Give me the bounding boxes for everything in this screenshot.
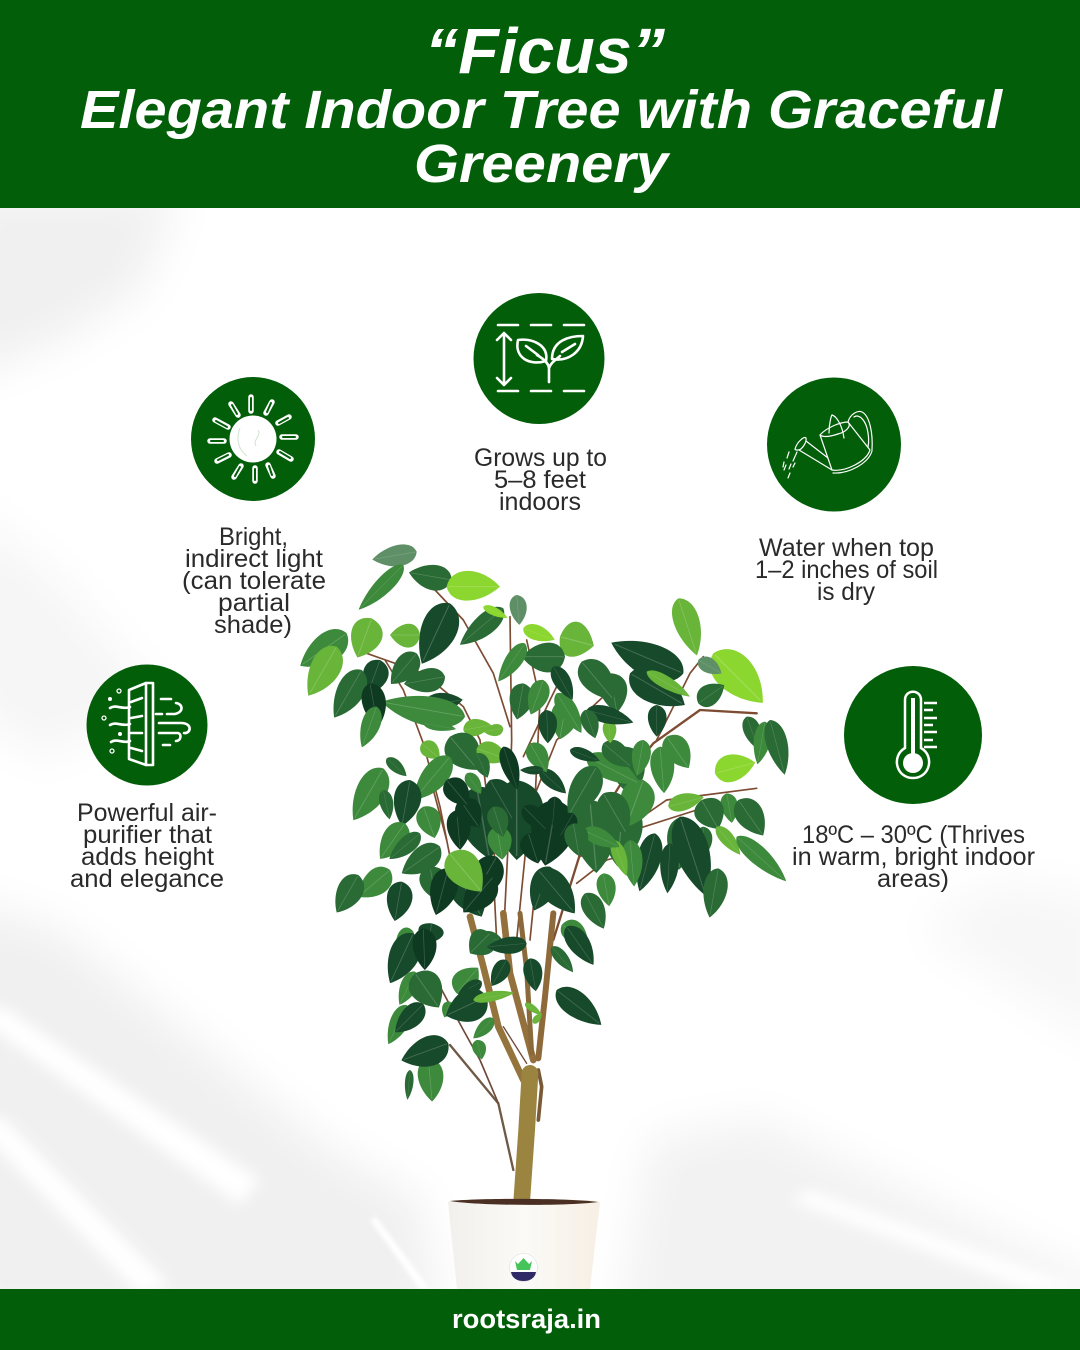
label: light: shade) <box>214 611 292 639</box>
website: rootsraja.in <box>452 1304 601 1334</box>
pot <box>448 1199 600 1289</box>
label: water <box>755 534 938 606</box>
label: temperature <box>792 821 1035 893</box>
label: height: indoors <box>499 488 581 516</box>
feature: height <box>474 293 607 516</box>
label: temperature: 18ºC – 30ºC (Thrives <box>802 821 1025 849</box>
footer bar <box>0 1289 1080 1350</box>
upper branches <box>367 590 757 940</box>
label: light: (can tolerate <box>182 567 326 595</box>
icon: thermometer <box>844 666 982 804</box>
pot logo <box>510 1254 538 1282</box>
feature: air purifier <box>70 664 224 893</box>
label: temperature: areas) <box>877 865 949 893</box>
label: light: indirect light <box>185 545 323 573</box>
soil <box>450 1199 598 1205</box>
title: Elegant Indoor Tree with Graceful <box>80 80 1003 140</box>
label: height: 5–8 feet <box>494 466 586 494</box>
label: water: Water when top <box>759 534 934 562</box>
header banner <box>0 0 1080 208</box>
label: light: partial <box>218 589 290 617</box>
label: air purifier: adds height <box>81 843 214 871</box>
label: light <box>182 523 326 639</box>
feature: light <box>182 377 326 639</box>
label: air purifier: Powerful air- <box>77 799 217 827</box>
lower foliage <box>377 920 610 1103</box>
icon: watering can <box>767 378 901 512</box>
plant <box>292 542 796 1289</box>
icon: sun <box>191 377 315 501</box>
title <box>80 15 1003 194</box>
label: height: Grows up to <box>474 444 607 472</box>
trunk and lower branches <box>440 913 553 1202</box>
title: “Ficus” <box>425 15 665 87</box>
icon: plant height <box>474 293 604 424</box>
feature: temperature <box>792 666 1035 893</box>
title: Greenery <box>414 134 671 194</box>
label: light: Bright, <box>219 523 288 551</box>
label: air purifier: purifier that <box>83 821 212 849</box>
label: air purifier: and elegance <box>70 865 224 893</box>
feature: water <box>755 378 938 606</box>
label: water: 1–2 inches of soil <box>755 556 938 584</box>
icon: air filter <box>86 664 208 786</box>
label: water: is dry <box>817 578 875 606</box>
label: air purifier <box>70 799 224 893</box>
label: temperature: in warm, bright indoor <box>792 843 1035 871</box>
upper foliage <box>292 542 796 949</box>
label: height <box>474 444 607 516</box>
